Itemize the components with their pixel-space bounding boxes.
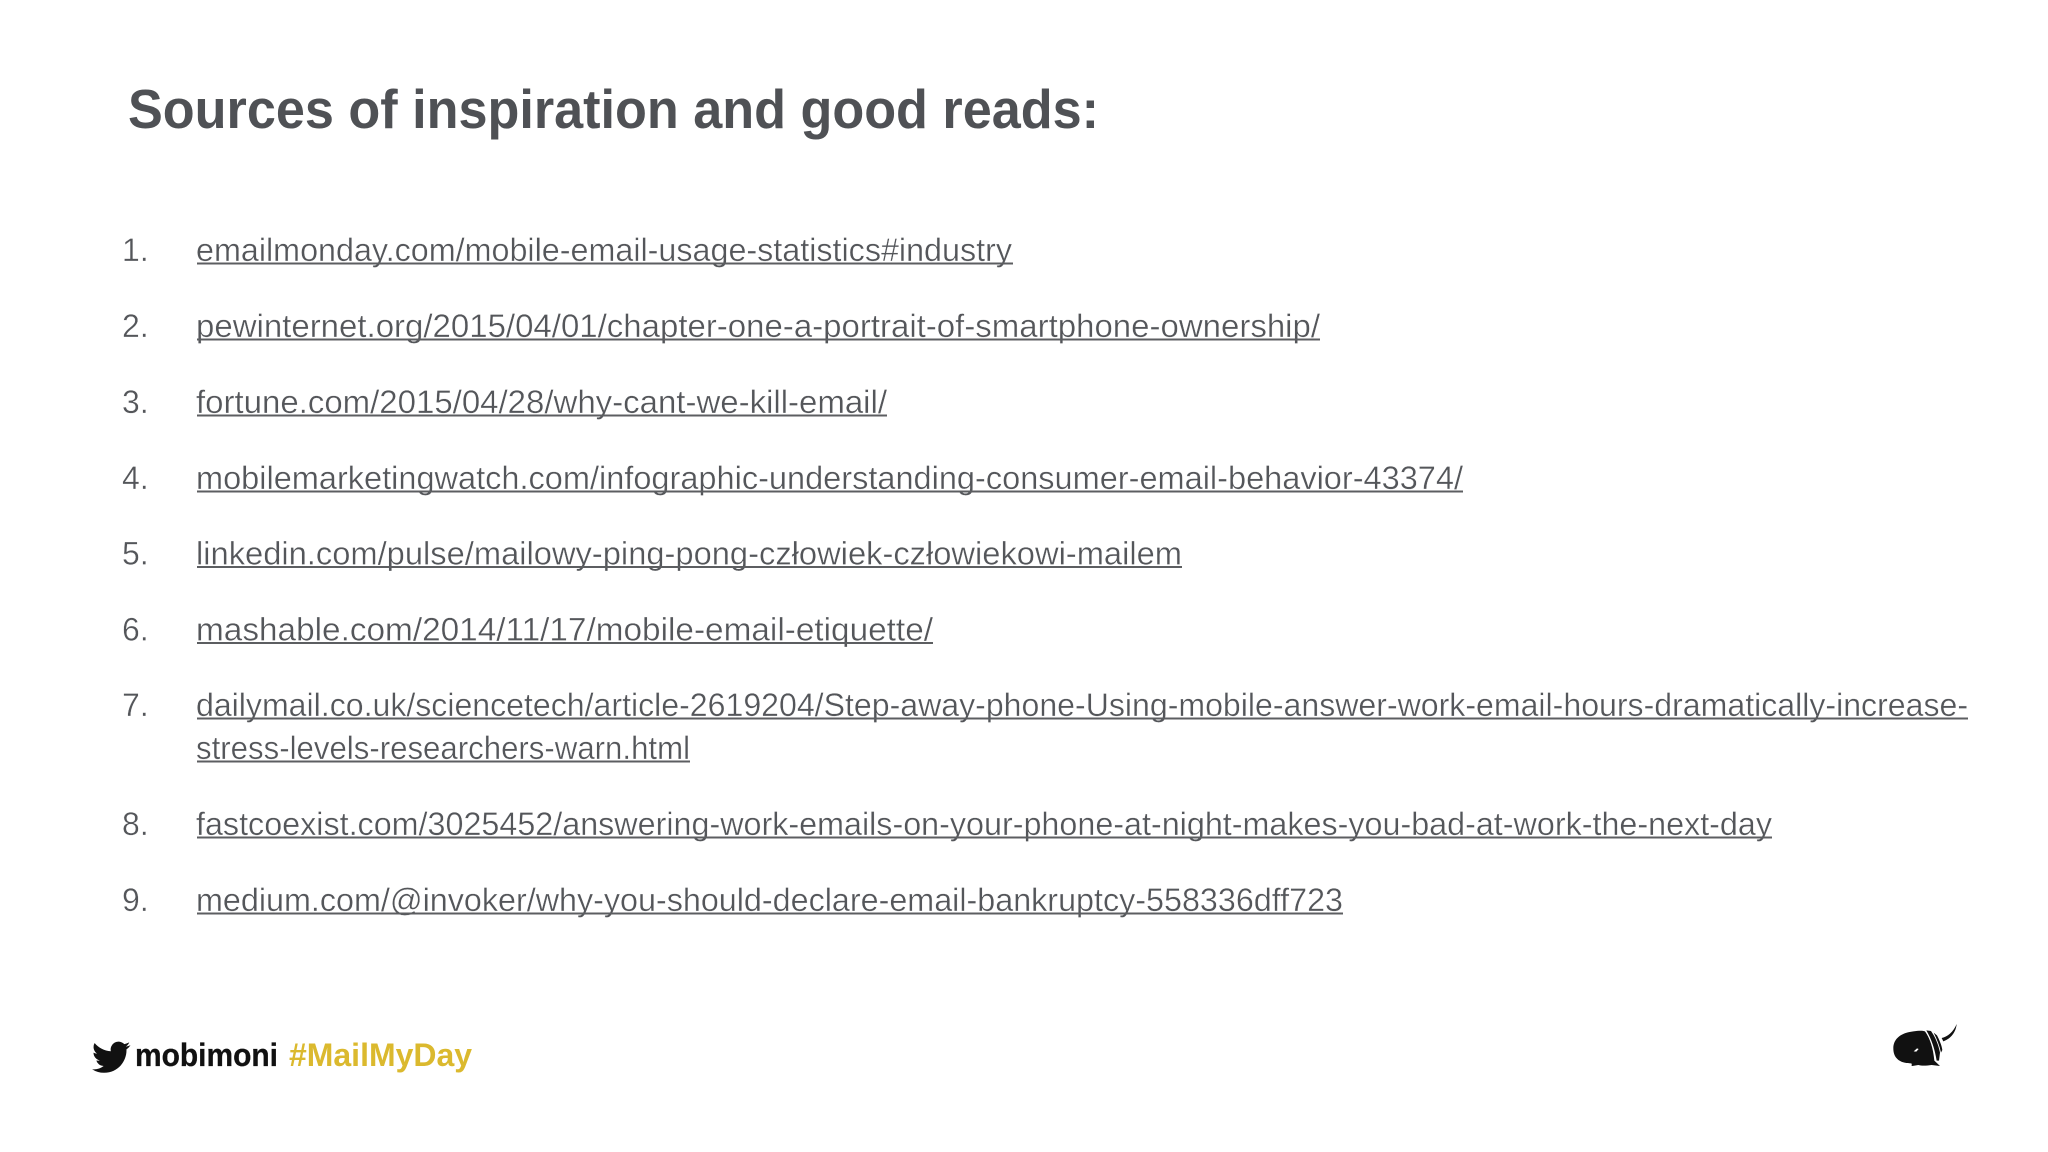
icon: twitter bird — [92, 1042, 130, 1073]
title: Sources of inspiration and good reads: — [128, 78, 1099, 140]
item 7: 7. — [122, 687, 149, 723]
item 7 — [122, 687, 1968, 766]
item 1: 1. — [122, 232, 149, 268]
item 3: 3. — [122, 384, 149, 420]
item 3: fortune.com/2015/04/28/why-cant-we-kill-email/ — [196, 384, 887, 420]
item 1: emailmonday.com/mobile-email-usage-statistics#industry — [196, 232, 1012, 268]
item 9: 9. — [122, 882, 149, 918]
item 5: 5. — [122, 536, 149, 572]
item 2: pewinternet.org/2015/04/01/chapter-one-a-portrait-of-smartphone-ownership/ — [196, 308, 1320, 344]
item 4: 4. — [122, 460, 149, 496]
item 8: 8. — [122, 806, 149, 842]
item 7: dailymail.co.uk/sciencetech/article-2619204/Step-away-phone-Using-mobile-answer-work-email-hours-dramatically-increase- — [196, 687, 1968, 723]
item 9: medium.com/@invoker/why-you-should-declare-email-bankruptcy-558336dff723 — [196, 882, 1343, 918]
item 2: 2. — [122, 308, 149, 344]
item 6: mashable.com/2014/11/17/mobile-email-etiquette/ — [196, 612, 933, 648]
item 5: linkedin.com/pulse/mailowy-ping-pong-człowiek-człowiekowi-mailem — [196, 536, 1182, 572]
item 8: fastcoexist.com/3025452/answering-work-emails-on-your-phone-at-night-makes-you-bad-at-work-the-next-day — [196, 806, 1772, 842]
icon: whale logo — [1893, 1024, 1957, 1066]
handle: mobimoni: mobimoni — [135, 1037, 278, 1073]
source list — [122, 232, 1968, 918]
item 6: 6. — [122, 612, 149, 648]
item 7: stress-levels-researchers-warn.html — [196, 730, 690, 766]
hashtag: #MailMyDay — [289, 1037, 472, 1073]
item 4: mobilemarketingwatch.com/infographic-understanding-consumer-email-behavior-43374/ — [196, 460, 1463, 496]
